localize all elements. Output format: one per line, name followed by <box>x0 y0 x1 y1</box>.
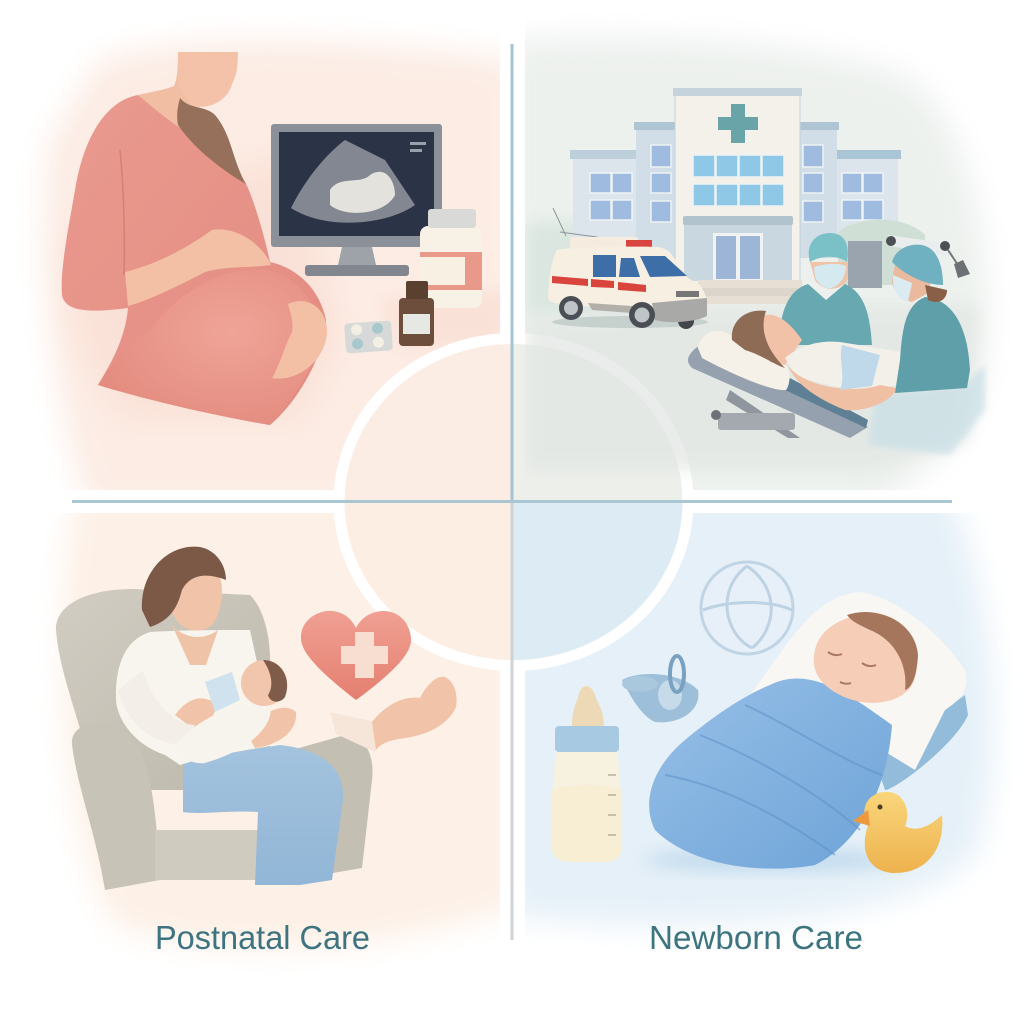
armchair <box>56 589 373 890</box>
pregnant woman <box>62 40 327 425</box>
nurse left <box>780 233 872 345</box>
panel: prenatal care <box>62 40 482 425</box>
cross sign <box>718 104 758 143</box>
ground and hills <box>525 221 980 470</box>
mother <box>116 547 343 885</box>
pacifier <box>622 656 698 722</box>
panel: postnatal care <box>56 547 457 890</box>
blister pack <box>344 320 393 354</box>
panel: hospital care <box>525 88 985 470</box>
baby in blanket <box>645 612 918 872</box>
hospital building <box>570 88 925 304</box>
brown bottle <box>399 281 434 346</box>
divider lines <box>72 44 952 940</box>
steps <box>698 280 802 288</box>
baby <box>175 660 287 763</box>
medicine bottle <box>420 209 482 308</box>
hospital bed <box>688 331 868 438</box>
nurse right <box>892 245 970 393</box>
teething ring <box>701 562 793 654</box>
heading: postnatal care: Postnatal Care <box>155 919 370 956</box>
rubber duck <box>853 792 942 873</box>
windows <box>693 155 784 206</box>
baby bottle <box>552 686 622 862</box>
entrance <box>684 224 792 281</box>
patient <box>732 311 902 410</box>
pillow <box>750 592 968 790</box>
ambulance <box>548 208 708 329</box>
heading: newborn care: Newborn Care <box>649 919 863 956</box>
panel: newborn care <box>552 562 968 873</box>
central circle <box>339 330 688 667</box>
ultrasound monitor <box>271 124 442 276</box>
side annex <box>838 220 925 285</box>
bed drape <box>868 365 985 455</box>
helping hand <box>330 677 457 752</box>
surgical lamp <box>886 235 970 278</box>
heart with cross <box>301 611 411 700</box>
